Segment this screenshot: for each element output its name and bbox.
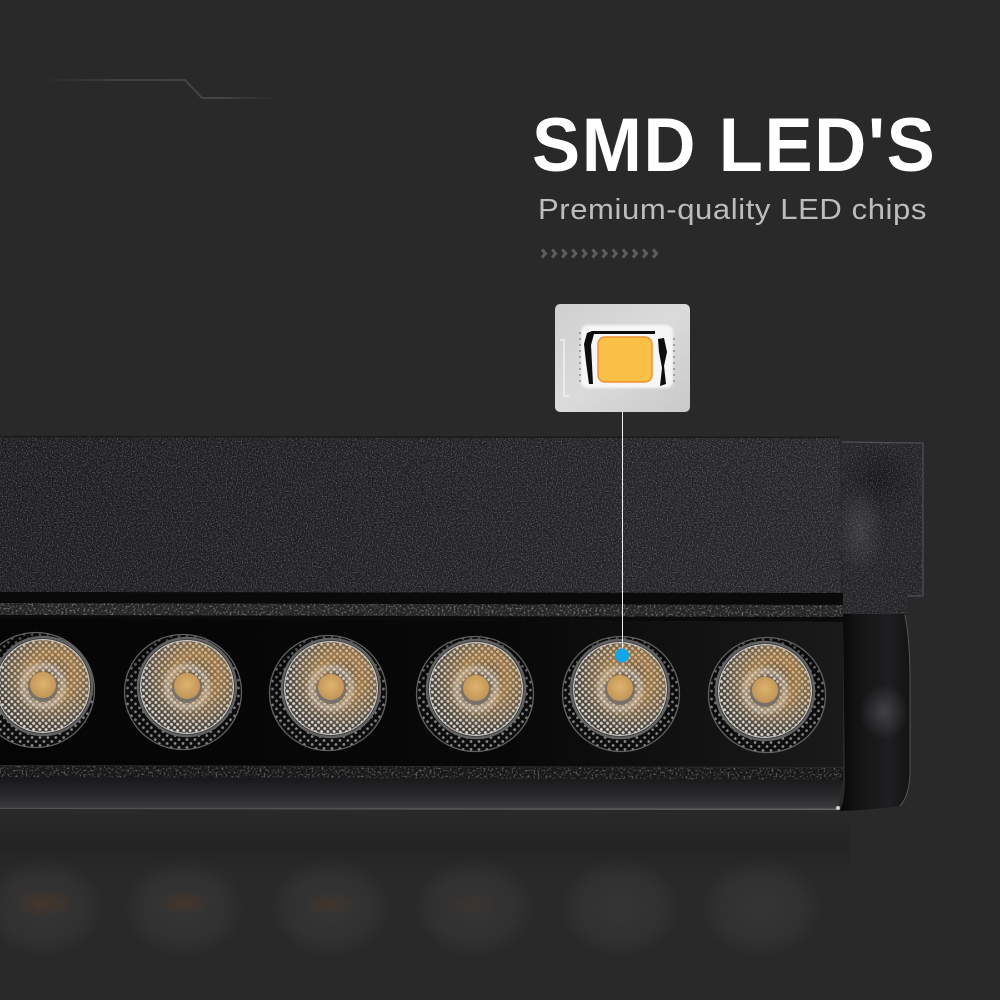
reflection of the lamp on the surface <box>0 812 850 958</box>
dark groove and upper textured band <box>0 592 843 622</box>
lens 1 <box>0 632 95 748</box>
black lens channel <box>0 618 843 767</box>
callout: chip close-up <box>555 304 690 412</box>
upper housing <box>0 436 841 593</box>
chevron row <box>542 250 657 258</box>
decorative circuit line <box>45 80 282 98</box>
rounded end cap <box>836 614 910 811</box>
lens 5 <box>562 636 680 752</box>
connector line <box>622 412 624 655</box>
right connector block <box>836 442 923 614</box>
lens 4 <box>416 636 534 752</box>
black chip outline <box>584 331 667 386</box>
lens 6 <box>708 637 826 753</box>
lens 3 <box>269 635 387 751</box>
title: SMD LED'S <box>532 102 935 187</box>
lower textured band <box>0 766 843 780</box>
lens 2 <box>124 634 242 750</box>
lower lip <box>0 777 843 810</box>
lamp: track light body <box>0 436 923 811</box>
subtitle: Premium-quality LED chips <box>538 194 926 226</box>
blue marker dot <box>615 648 629 662</box>
LED chip <box>598 337 652 382</box>
